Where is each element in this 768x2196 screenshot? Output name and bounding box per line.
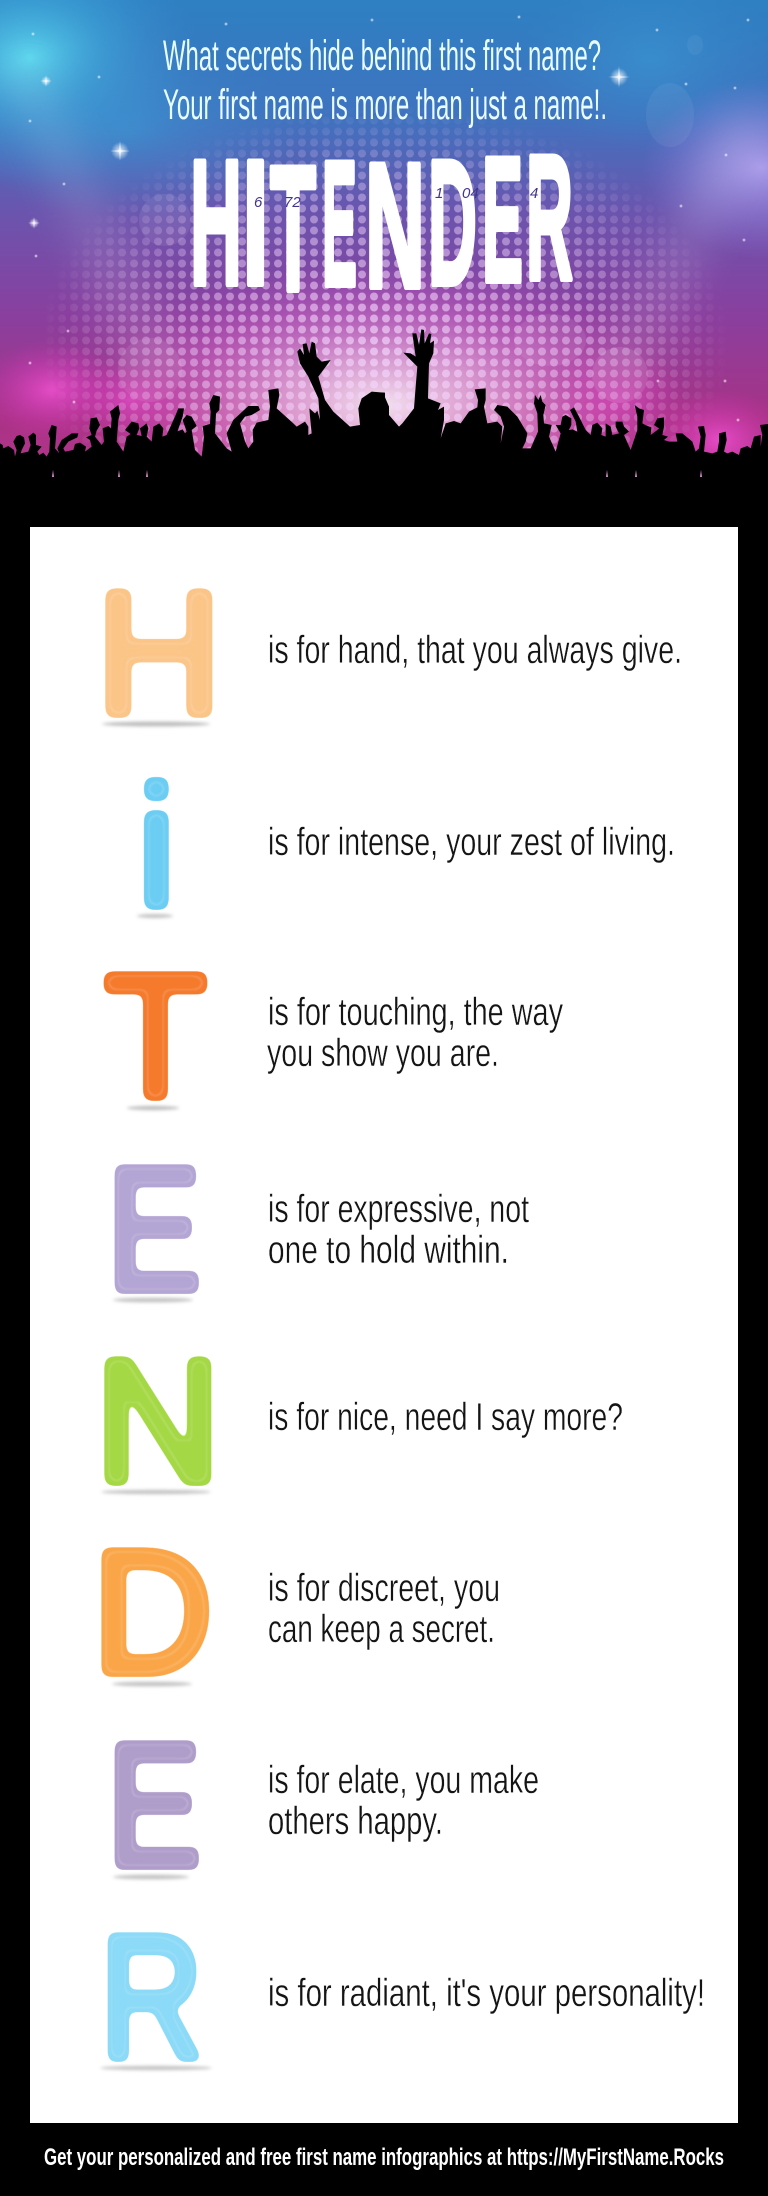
name title HITENDER: N: [365, 126, 425, 325]
title grunge marks: 1: [435, 185, 443, 202]
letter H: H: [96, 555, 222, 750]
row H: [96, 555, 682, 750]
row I: [137, 752, 675, 942]
name title HITENDER: D: [428, 123, 477, 322]
row R: [100, 1900, 705, 2094]
header background: concert lights: [0, 0, 768, 456]
text E: one to hold within.: [268, 1229, 509, 1272]
text N: is for nice, need I say more?: [268, 1396, 623, 1439]
text D: can keep a secret.: [268, 1608, 495, 1651]
shadow under R: [100, 2066, 212, 2070]
text E: is for expressive, not: [268, 1188, 529, 1231]
row D: [92, 1516, 500, 1710]
white content panel: [30, 527, 738, 2123]
crowd silhouette: [0, 329, 768, 530]
name title HITENDER: T: [270, 129, 316, 328]
letter E: E: [107, 1132, 201, 1326]
shadow under N: [101, 1490, 211, 1494]
text T: you show you are.: [267, 1032, 499, 1075]
row T: [104, 940, 563, 1134]
header intro text: [163, 32, 607, 129]
title grunge marks: 6: [254, 194, 263, 211]
shadow under E: [113, 1298, 193, 1302]
title grunge marks: 72: [284, 194, 301, 211]
title grunge marks: 4: [530, 185, 538, 202]
text T: is for touching, the way: [268, 991, 563, 1034]
text E second: others happy.: [268, 1800, 443, 1843]
text E: [268, 1188, 529, 1272]
name title HITENDER: E: [482, 120, 523, 319]
row E: [107, 1132, 529, 1326]
text D: is for discreet, you: [268, 1567, 500, 1610]
row E second: [107, 1708, 539, 1902]
letter N: N: [95, 1323, 221, 1518]
name title HITENDER: E: [322, 124, 357, 323]
shadow under H: [102, 722, 210, 726]
letter E second: E: [107, 1708, 201, 1902]
text: R: [526, 118, 573, 317]
text E second: [268, 1759, 539, 1843]
shadow under T: [127, 1106, 179, 1110]
name title HITENDER: I: [242, 123, 269, 322]
letter T: T: [104, 940, 207, 1134]
title grunge marks: 04: [462, 185, 479, 202]
letter R: R: [100, 1900, 203, 2094]
name title HITENDER: [190, 118, 573, 328]
shadow under i: [137, 914, 173, 918]
shadow under second E: [113, 1875, 189, 1879]
title grunge marks: [254, 185, 538, 211]
row N: [95, 1323, 623, 1518]
shadow under D: [112, 1682, 192, 1686]
letter D: D: [92, 1516, 212, 1710]
name title HITENDER: H: [190, 123, 242, 322]
letter i: i: [138, 752, 175, 942]
text T: [267, 991, 563, 1075]
text D: [268, 1567, 500, 1651]
text E second: is for elate, you make: [268, 1759, 539, 1802]
